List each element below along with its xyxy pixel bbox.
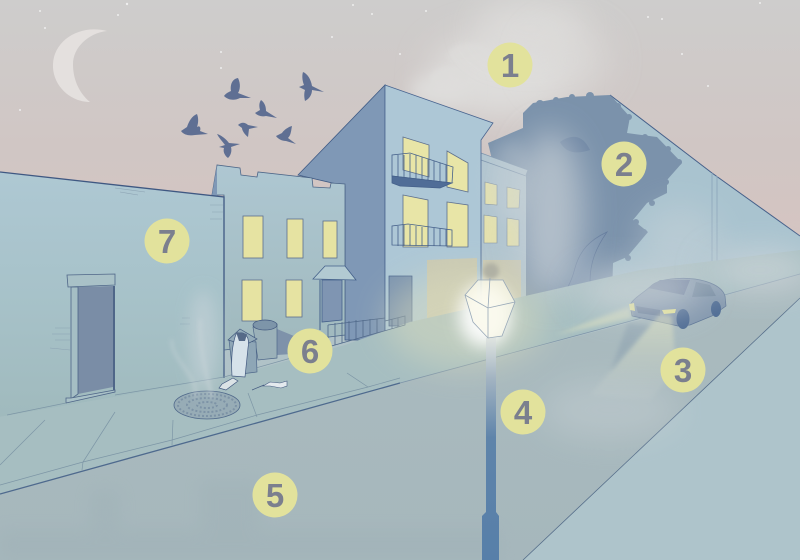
birds bbox=[181, 72, 324, 158]
curb line bbox=[0, 274, 800, 494]
row house bbox=[212, 165, 356, 350]
upper fog cloud bbox=[410, 0, 610, 117]
tree trunk bbox=[552, 232, 612, 304]
far wall building bbox=[600, 95, 800, 300]
marker 7 bbox=[144, 218, 190, 264]
manhole steam bbox=[172, 290, 217, 397]
ground fog bbox=[488, 130, 800, 440]
marker 5: 5 bbox=[266, 477, 284, 514]
marker 6: 6 bbox=[301, 333, 319, 370]
number markers bbox=[144, 42, 706, 518]
iron fence bbox=[328, 316, 405, 347]
moon bbox=[53, 29, 107, 102]
rat bbox=[252, 381, 287, 390]
marker 2: 2 bbox=[615, 146, 633, 183]
sidewalk lines bbox=[0, 347, 400, 485]
street lamp bbox=[385, 263, 545, 560]
big building side bbox=[298, 85, 385, 340]
lamp glow bbox=[385, 272, 545, 368]
raccoon bbox=[219, 332, 248, 390]
right sidewalk bbox=[523, 298, 800, 560]
left brick wall bbox=[0, 172, 224, 417]
marker 5 bbox=[252, 472, 298, 518]
roller door bbox=[66, 274, 115, 403]
marker 1: 1 bbox=[501, 47, 519, 84]
marker 6 bbox=[288, 328, 332, 374]
brick patches bbox=[50, 188, 223, 350]
marker 3 bbox=[660, 348, 706, 392]
marker 4: 4 bbox=[514, 394, 533, 431]
car headlight beams bbox=[555, 306, 676, 400]
marker 2 bbox=[602, 142, 646, 186]
manhole bbox=[174, 391, 240, 419]
tree bbox=[488, 92, 682, 305]
car bbox=[629, 278, 726, 329]
marker 4 bbox=[500, 390, 546, 434]
lamp post bbox=[482, 338, 499, 560]
trash cans bbox=[228, 320, 294, 375]
stoop and door bbox=[313, 266, 356, 330]
big building front bbox=[385, 85, 493, 332]
left sidewalk bbox=[0, 250, 800, 493]
lantern bbox=[465, 263, 515, 338]
marker 3: 3 bbox=[674, 352, 692, 389]
third building bbox=[481, 142, 528, 310]
marker 1 bbox=[488, 42, 532, 88]
road bbox=[0, 274, 800, 560]
road stains bbox=[0, 480, 500, 560]
marker 7: 7 bbox=[158, 223, 176, 260]
stars bbox=[19, 2, 761, 111]
balconies bbox=[392, 153, 453, 246]
night sky bbox=[0, 0, 800, 300]
